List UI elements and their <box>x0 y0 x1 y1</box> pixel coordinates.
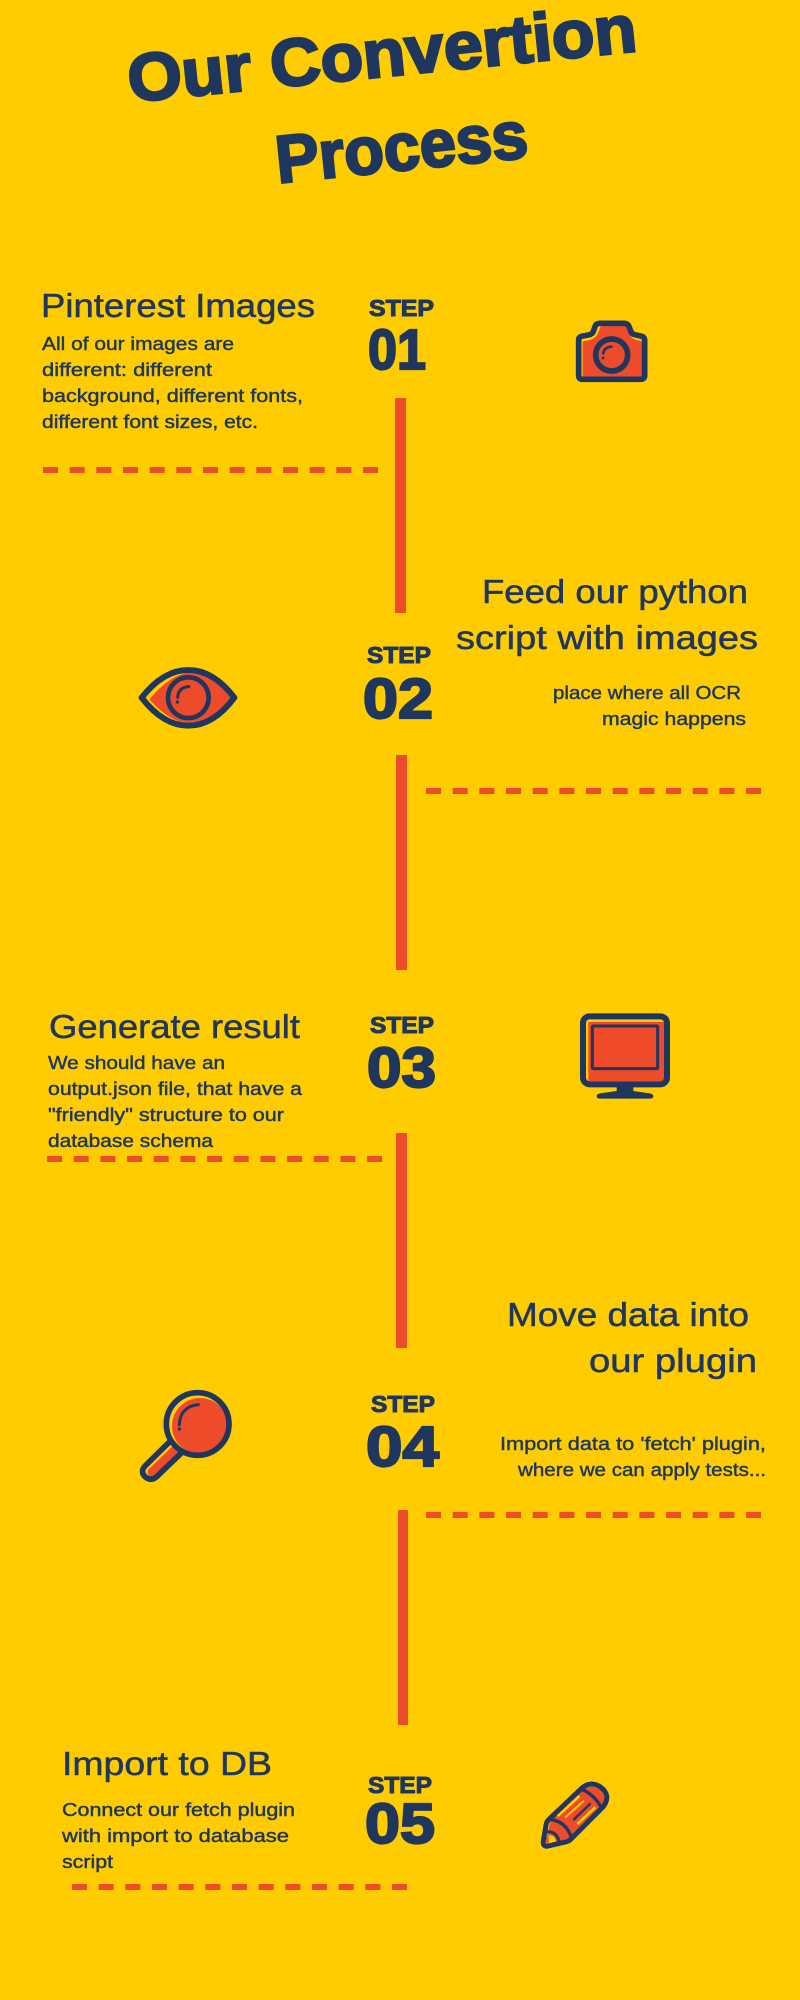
text block: step 4 description: Import data to 'fetch' plugin, <box>500 1433 766 1454</box>
step number 01: STEP <box>369 295 434 321</box>
connector: step 1 to step 2 <box>395 398 406 613</box>
divider: step 2 dashed line <box>426 788 761 794</box>
text block: step 1 description: All of our images are <box>42 333 234 354</box>
step number 02 <box>363 642 433 731</box>
step number 05 <box>365 1772 435 1856</box>
text block: step 1 description: different font sizes, etc. <box>42 411 258 432</box>
text block: step 1 description <box>42 333 303 432</box>
icon: monitor <box>583 1016 667 1099</box>
panel: step 4 <box>142 1296 766 1480</box>
text block: step 3 description: output.json file, that have a <box>48 1078 303 1099</box>
panel: step 1 <box>41 287 645 432</box>
text block: step 5 description: script <box>62 1851 113 1872</box>
text block: step 5 description: Connect our fetch plugin <box>62 1799 295 1820</box>
text block: step 3 description: database schema <box>48 1130 214 1151</box>
text block: step 1 description: different: different <box>42 359 212 380</box>
heading: Feed our python script with images <box>456 573 758 656</box>
connector: step 4 to step 5 <box>398 1510 408 1725</box>
heading: Move data into our plugin: our plugin <box>589 1342 757 1379</box>
text block: step 2 description: magic happens <box>602 708 746 729</box>
text block: step 3 description: "friendly" structure to our <box>48 1104 284 1125</box>
heading: Pinterest Images: Pinterest Images <box>41 287 315 324</box>
icon: pencil <box>543 1784 607 1846</box>
text block: step 3 description <box>48 1052 303 1151</box>
step number 03: 03 <box>367 1036 436 1100</box>
step number 04: STEP <box>371 1391 435 1417</box>
text block: step 2 description: place where all OCR <box>553 682 741 703</box>
step number 02: STEP <box>367 642 431 668</box>
step number 03: STEP <box>370 1012 434 1038</box>
divider: step 1 dashed line <box>43 467 378 473</box>
step number 05: STEP <box>368 1772 432 1798</box>
text block: step 5 description: with import to database <box>61 1825 289 1846</box>
text block: step 2 description <box>553 682 746 729</box>
step number 04 <box>366 1391 439 1479</box>
text block: step 4 description: where we can apply tests... <box>517 1459 766 1480</box>
text block: step 1 description: background, different fonts, <box>42 385 303 406</box>
connector: step 3 to step 4 <box>396 1133 407 1348</box>
heading: Move data into our plugin: Move data into <box>507 1296 749 1333</box>
heading: Generate result: Generate result <box>49 1008 300 1045</box>
panel: step 2 <box>142 573 758 731</box>
text block: step 3 description: We should have an <box>48 1052 225 1073</box>
heading: Move data into our plugin <box>507 1296 757 1379</box>
step number 05: 05 <box>365 1792 435 1856</box>
step number 04: 04 <box>366 1415 439 1479</box>
heading: Import to DB: Import to DB <box>62 1745 272 1782</box>
heading: Feed our python script with images: Feed our python <box>482 573 748 610</box>
step number 03 <box>367 1012 436 1100</box>
divider: step 3 dashed line <box>47 1156 382 1162</box>
icon: magnifier <box>142 1393 229 1479</box>
divider: step 4 dashed line <box>426 1512 761 1518</box>
divider: step 5 dashed line <box>72 1884 407 1890</box>
text block: step 4 description <box>500 1433 766 1480</box>
step number 02: 02 <box>363 667 433 731</box>
title: Process <box>272 97 531 198</box>
title <box>124 0 640 198</box>
panel: step 3 <box>48 1008 667 1151</box>
text block: step 5 description <box>61 1799 295 1872</box>
heading: Feed our python script with images: script with images <box>456 619 758 656</box>
connector: step 2 to step 3 <box>396 755 407 970</box>
icon: eye <box>142 670 234 726</box>
step number 01: 01 <box>368 318 426 382</box>
panel: step 5 <box>61 1745 607 1872</box>
icon: camera <box>579 323 645 379</box>
